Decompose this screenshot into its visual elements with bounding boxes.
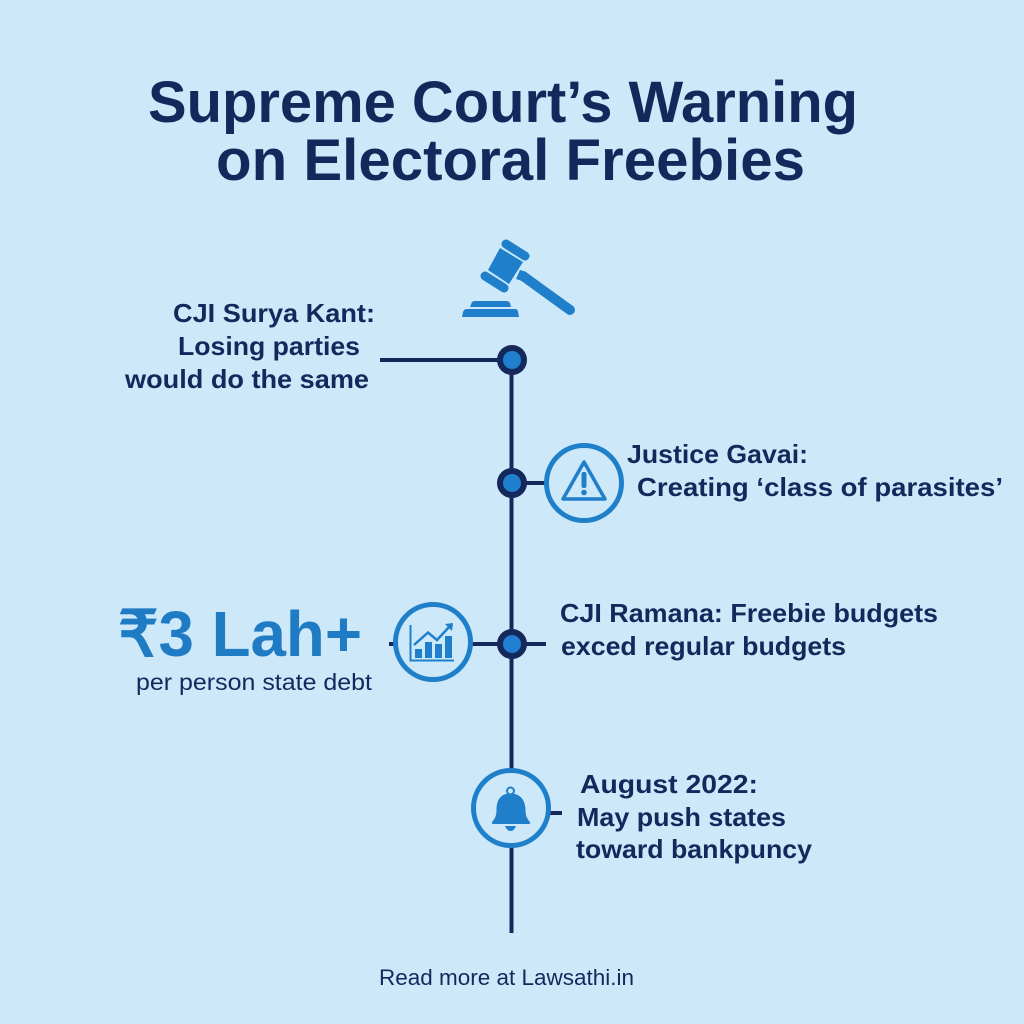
icon: warning triangle: [546, 446, 622, 520]
icon: bell: [474, 770, 548, 846]
icon: growth chart: [396, 604, 470, 680]
title: on Electoral Freebies: [216, 128, 805, 193]
text: August 2022 warning: May push states: [577, 802, 786, 832]
text: CJI Ramana quote: CJI Ramana: Freebie budgets: [560, 598, 938, 628]
connector: [512, 481, 546, 485]
connector: [380, 358, 500, 362]
text: August 2022 warning: August 2022:: [580, 769, 758, 799]
text: CJI Surya Kant quote: CJI Surya Kant:: [173, 298, 375, 328]
text: Justice Gavai quote: Justice Gavai:: [627, 439, 808, 469]
timeline node: [500, 471, 524, 495]
footer: Read more at Lawsathi.in: [379, 965, 634, 990]
item: Justice Gavai: [500, 439, 1003, 520]
stat: 3 lakh per person: ₹3 Lah+: [118, 598, 362, 670]
text: CJI Surya Kant quote: Losing parties: [178, 331, 360, 361]
title: [148, 70, 858, 193]
stat: 3 lakh per person: per person state debt: [136, 669, 373, 695]
item: CJI Surya Kant: [124, 298, 524, 394]
timeline spine: [510, 360, 514, 933]
text: CJI Ramana quote: [560, 598, 938, 661]
text: August 2022 warning: [576, 769, 813, 864]
text: August 2022 warning: toward bankpuncy: [576, 834, 813, 864]
text: Justice Gavai quote: [627, 439, 1003, 502]
text: CJI Surya Kant quote: would do the same: [124, 364, 369, 394]
title: Supreme Court’s Warning: [148, 70, 858, 135]
text: CJI Ramana quote: exced regular budgets: [561, 631, 846, 661]
icon: gavel: [462, 244, 570, 317]
timeline node: [500, 632, 524, 656]
text: CJI Surya Kant quote: [124, 298, 375, 394]
item: state debt and CJI Ramana: [118, 598, 938, 695]
item: August 2022: [474, 769, 813, 864]
connector: [548, 811, 562, 815]
text: Justice Gavai quote: Creating ‘class of parasites’: [637, 472, 1003, 502]
connector: [389, 642, 546, 646]
timeline node: [500, 348, 524, 372]
